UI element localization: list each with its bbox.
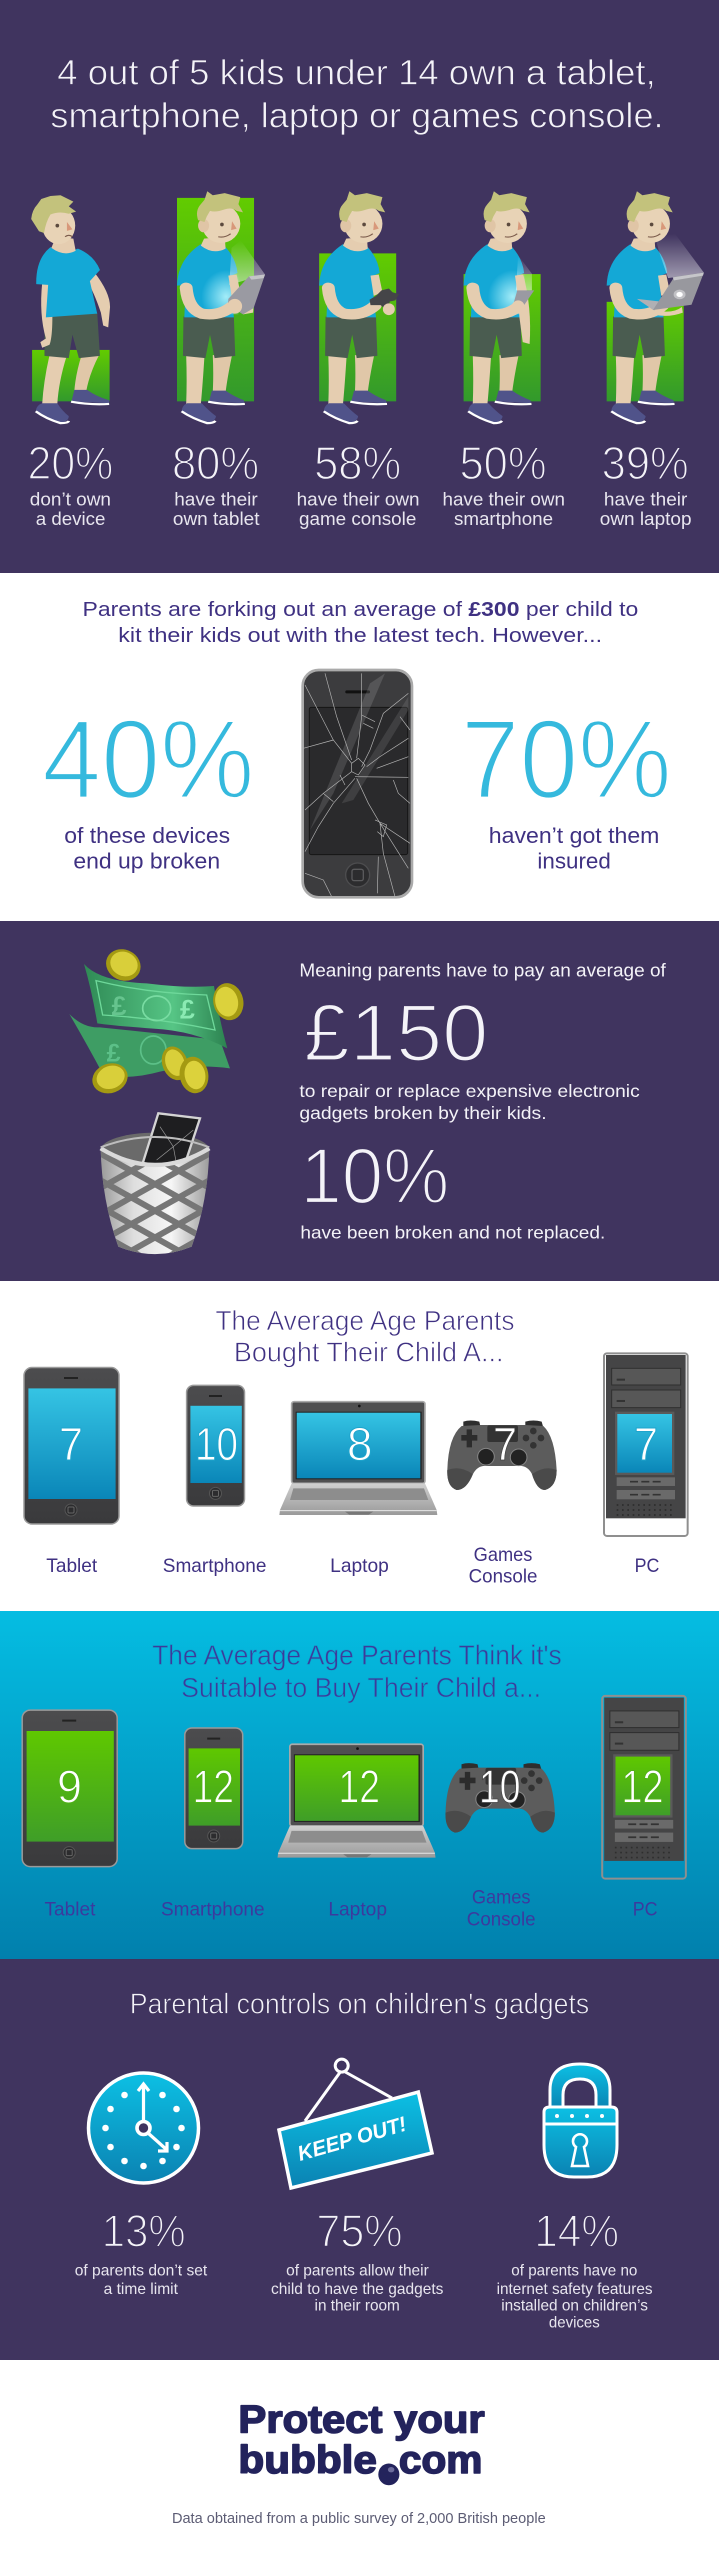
panel: parental controls — [75, 1988, 653, 2331]
stats row: 58% — [314, 438, 401, 490]
device labels: Tablet — [46, 1555, 98, 1577]
text: not replaced: have been broken and not replaced. — [300, 1223, 605, 1243]
icon: waste bin with phone — [100, 1112, 210, 1254]
stat: time limit: of parents don’t set — [75, 2261, 207, 2279]
heading: Bought Their Child A... — [234, 1337, 503, 1368]
heading: Parental controls on children's gadgets — [130, 1988, 589, 2020]
stat: gadgets in room: 75% — [316, 2205, 403, 2256]
boy: game console, 58% — [319, 191, 399, 423]
text: repair or replace — [299, 1081, 640, 1123]
stats row: have their own — [443, 489, 565, 510]
stat: 40% broken: of these devices — [64, 823, 230, 848]
stat: internet safety: installed on children’s — [501, 2296, 648, 2314]
boy: smartphone, 50% — [464, 191, 541, 423]
icon: tablet age 7 — [24, 1368, 119, 1524]
stat: 70% uninsured: 70% — [461, 696, 672, 822]
icon: laptop age 8: 8 — [347, 1418, 372, 1470]
icon: smartphone age 10 — [187, 1385, 244, 1506]
heading — [152, 1640, 562, 1704]
device labels: PC — [635, 1555, 659, 1577]
device labels: Games — [474, 1545, 533, 1566]
text: repair average: Meaning parents have to pay an average of — [299, 959, 667, 980]
stats row: 80% — [172, 438, 259, 490]
stat: 40% broken: 40% — [42, 696, 254, 822]
icon: money and coins: £ — [112, 991, 127, 1021]
device labels: PC — [633, 1899, 658, 1920]
stats row: 50% — [459, 438, 547, 490]
icon: tablet age 9 — [22, 1710, 117, 1867]
icon: game controller age 10: 10 — [479, 1760, 520, 1812]
stats row: have their own — [297, 489, 420, 510]
stats row: have their — [174, 489, 258, 510]
stat: 10 percent: 10% — [300, 1132, 449, 1220]
stats row: smartphone — [454, 509, 553, 530]
stats row: a device — [36, 509, 105, 530]
stat: 70% uninsured — [461, 696, 672, 873]
stat: internet safety: 14% — [534, 2205, 619, 2256]
heading: Parents are forking out an average of £300 per child to — [83, 599, 638, 621]
icon: money and coins: £ — [107, 1040, 121, 1068]
device labels: Laptop — [330, 1555, 389, 1577]
icon: PC age 12 — [602, 1696, 686, 1879]
stat: 70% uninsured: haven’t got them — [489, 823, 659, 848]
device labels: Console — [467, 1909, 536, 1930]
logo: bubble — [238, 2439, 377, 2482]
icon: laptop age 12 — [278, 1744, 436, 1858]
icon: smartphone age 10: 10 — [195, 1418, 238, 1470]
boy: tablet, 80% — [177, 191, 265, 423]
stat: 40% broken — [42, 696, 254, 873]
boy: no device, 20% — [31, 195, 110, 423]
stat: 150 pounds: £150 — [304, 988, 488, 1078]
panel: broken devices — [42, 599, 672, 873]
device labels: Laptop — [328, 1899, 387, 1920]
stats row: don’t own — [30, 489, 111, 510]
icon: money and coins: £ — [180, 994, 195, 1024]
heading — [216, 1306, 514, 1368]
stat: gadgets in room: of parents allow their — [286, 2261, 429, 2279]
icon: padlock — [544, 2064, 617, 2177]
stat: internet safety: internet safety features — [497, 2279, 653, 2298]
stats row — [28, 438, 691, 530]
logo: com — [399, 2439, 482, 2482]
stat: 70% uninsured: insured — [537, 848, 611, 873]
device labels: Smartphone — [163, 1555, 266, 1577]
icon: smartphone age 12 — [185, 1728, 243, 1849]
icon: laptop age 12: 12 — [338, 1760, 380, 1812]
icon: PC age 12: 12 — [622, 1760, 664, 1812]
panel: device ownership — [28, 54, 704, 530]
stats row: game console — [299, 509, 416, 530]
heading: kit their kids out with the latest tech. However... — [118, 625, 602, 647]
panel: logo and source — [172, 2399, 546, 2527]
icon: clock — [88, 2073, 198, 2183]
stat: gadgets in room: child to have the gadgets — [271, 2279, 444, 2298]
stats row: have their — [604, 489, 687, 510]
stat: internet safety: of parents have no — [511, 2261, 637, 2279]
logo: Protect your — [238, 2399, 485, 2442]
icon: cracked phone — [303, 670, 412, 897]
text: repair or replace: gadgets broken by their kids. — [299, 1103, 547, 1123]
stats row: 20% — [28, 438, 113, 490]
device labels: Games — [472, 1887, 531, 1909]
heading — [83, 599, 638, 647]
device labels — [46, 1545, 659, 1588]
icon: PC age 7: 7 — [634, 1418, 658, 1470]
heading: Suitable to Buy Their Child a... — [181, 1673, 541, 1704]
device labels: Smartphone — [161, 1899, 265, 1920]
device labels: Console — [469, 1566, 537, 1588]
stats row: own tablet — [173, 509, 260, 530]
title — [50, 54, 664, 136]
icon: game controller age 10 — [445, 1760, 555, 1833]
icon: game controller age 7 — [447, 1418, 557, 1490]
source note: Data obtained from a public survey of 2,000 British people — [172, 2511, 546, 2527]
icon: keep out sign: KEEP OUT! — [295, 2113, 409, 2166]
device labels — [44, 1887, 658, 1930]
stat: internet safety — [497, 2205, 653, 2331]
panel: average age suitable — [44, 1640, 658, 1930]
stat: time limit: a time limit — [104, 2279, 178, 2298]
stat: 40% broken: end up broken — [73, 848, 220, 873]
icon: PC age 7 — [604, 1353, 688, 1536]
stat: time limit: 13% — [102, 2205, 186, 2256]
text: repair or replace: to repair or replace expensive electronic — [299, 1081, 640, 1101]
icon: laptop age 8 — [279, 1402, 437, 1515]
stat: time limit — [75, 2205, 207, 2298]
panel: repair cost — [299, 959, 667, 1243]
heading: The Average Age Parents — [216, 1306, 514, 1337]
stat: gadgets in room — [271, 2205, 444, 2314]
stats row: own laptop — [600, 509, 691, 530]
boy: laptop, 39% — [607, 191, 704, 423]
panel: average age bought — [46, 1306, 659, 1588]
stats row: 39% — [602, 438, 689, 490]
icon: smartphone age 12: 12 — [193, 1760, 234, 1812]
icon: tablet age 7: 7 — [59, 1418, 83, 1470]
stat: gadgets in room: in their room — [315, 2296, 400, 2314]
stat: internet safety: devices — [549, 2313, 600, 2331]
icon: tablet age 9: 9 — [57, 1760, 82, 1812]
icon: keep out sign — [279, 2059, 432, 2188]
icon: game controller age 7: 7 — [493, 1418, 517, 1470]
icon: money and coins — [69, 944, 247, 1098]
device labels: Tablet — [44, 1899, 96, 1920]
logo — [238, 2399, 485, 2484]
heading: The Average Age Parents Think it's — [152, 1640, 562, 1671]
